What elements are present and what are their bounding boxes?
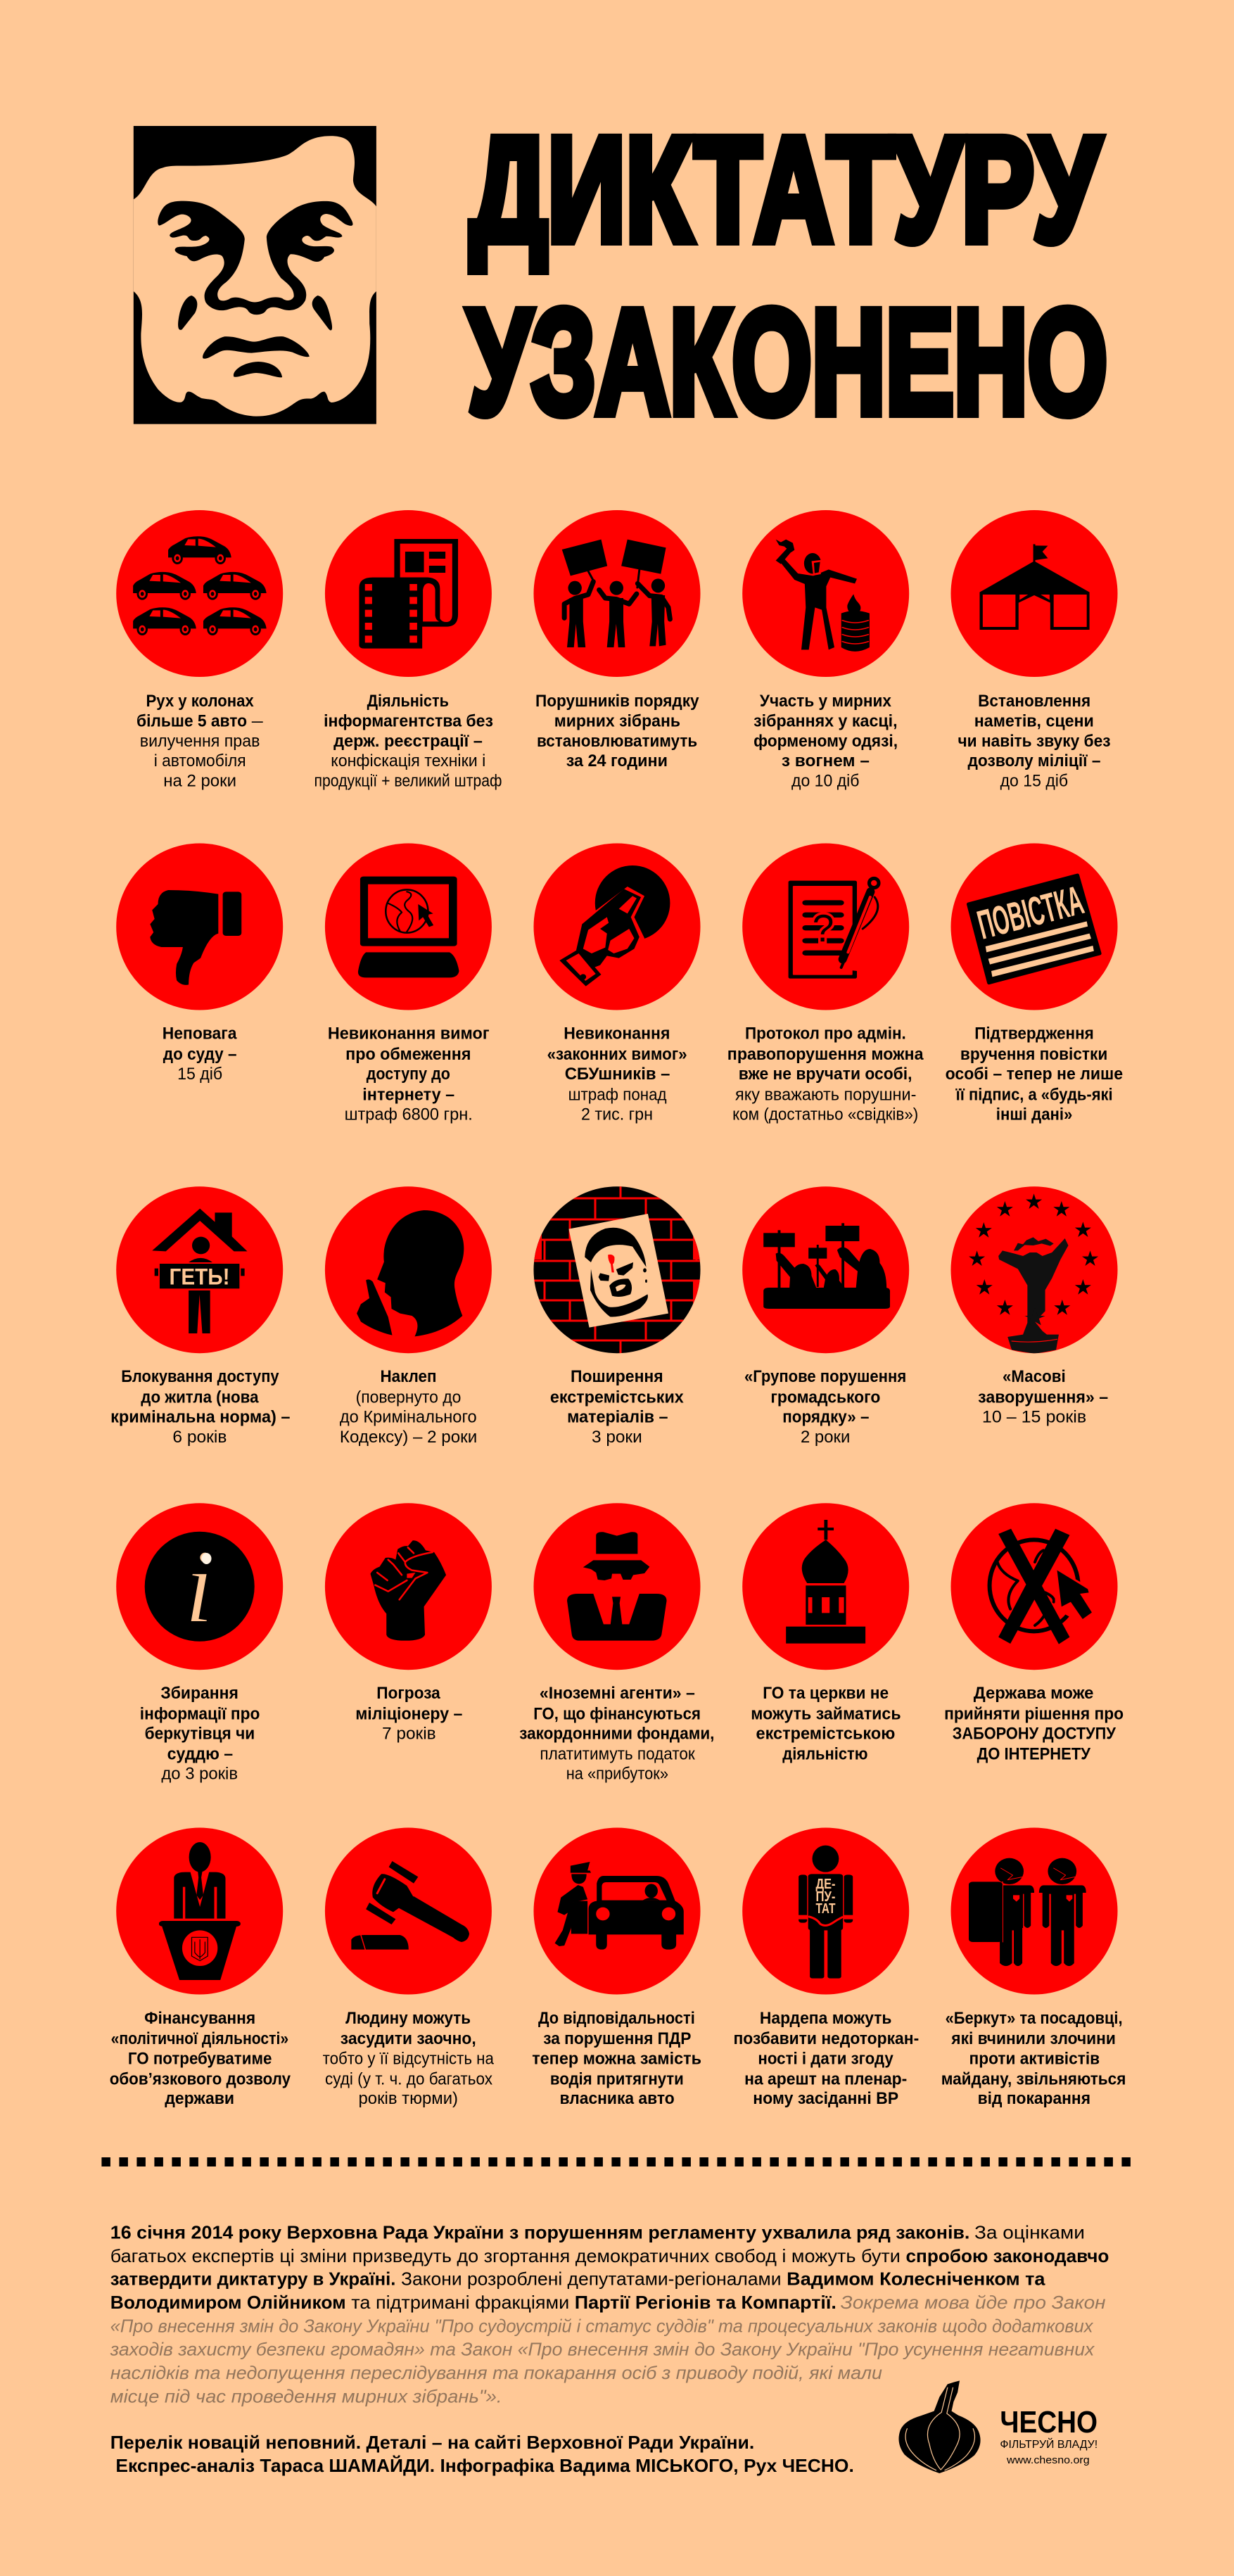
text block: credits: Експрес-аналіз Тараса ШАМАЙДИ. Інфографіка Вадима МІСЬКОГО, Рух ЧЕСНО. bbox=[115, 2455, 854, 2476]
caption bbox=[751, 1684, 901, 1764]
caption: мирних зібрань bbox=[554, 711, 680, 730]
caption bbox=[744, 1367, 906, 1447]
caption: громадського bbox=[770, 1388, 880, 1407]
caption: Встановлення bbox=[978, 692, 1090, 711]
caption bbox=[532, 2009, 701, 2108]
caption: на 2 роки bbox=[163, 771, 236, 790]
caption: років тюрми) bbox=[359, 2089, 458, 2108]
panel: protocol bbox=[727, 843, 924, 1124]
caption: можуть займатись bbox=[751, 1704, 901, 1723]
caption: Блокування доступу bbox=[121, 1367, 279, 1386]
panel: defamation bbox=[325, 1186, 492, 1447]
caption: до 3 років bbox=[161, 1764, 238, 1783]
caption: «політичної діяльності» bbox=[111, 2029, 288, 2048]
caption: ДО ІНТЕРНЕТУ bbox=[977, 1745, 1091, 1764]
caption: «Групове порушення bbox=[744, 1367, 906, 1386]
caption: діяльністю bbox=[782, 1745, 868, 1764]
icon: spy in hat bbox=[533, 1503, 701, 1670]
icon: gavel bbox=[325, 1828, 492, 1994]
caption bbox=[753, 692, 898, 790]
caption: міліціонеру – bbox=[355, 1704, 462, 1723]
caption: «законних вимог» bbox=[547, 1045, 687, 1064]
logo: Chesno garlic: www.chesno.org bbox=[1006, 2454, 1090, 2466]
icon: speaker at podium bbox=[116, 1828, 283, 1994]
caption: інформації про bbox=[140, 1704, 260, 1723]
icon: stencil portrait of Yanukovych bbox=[134, 126, 376, 424]
caption: Рух у колонах bbox=[146, 692, 254, 711]
caption: Нардепа можуть bbox=[760, 2009, 892, 2028]
caption: 6 років bbox=[172, 1428, 227, 1447]
caption: Кодексу) – 2 роки bbox=[340, 1428, 477, 1447]
caption: більше 5 авто bbox=[136, 711, 247, 730]
caption: платитимуть податок bbox=[540, 1745, 695, 1764]
panel: internet restrictions bbox=[325, 843, 492, 1124]
logo: Chesno garlic: ФІЛЬТРУЙ ВЛАДУ! bbox=[1000, 2437, 1098, 2451]
caption: дозволу міліції – bbox=[968, 751, 1100, 770]
caption bbox=[550, 1367, 684, 1447]
panel: group violation bbox=[742, 1186, 909, 1447]
caption: матеріалів – bbox=[567, 1408, 668, 1427]
caption bbox=[978, 1367, 1108, 1427]
icon: thumbs down bbox=[116, 843, 283, 1010]
caption: до Кримінального bbox=[340, 1408, 477, 1427]
caption: Порушників порядку bbox=[535, 692, 699, 711]
caption bbox=[110, 1367, 290, 1447]
caption bbox=[136, 692, 264, 790]
icon: silhouette with finger on lips bbox=[325, 1186, 492, 1353]
caption: конфіскація техніки і bbox=[331, 751, 485, 770]
icon: handcuffed deputy: ТАТ bbox=[816, 1901, 836, 1917]
caption bbox=[535, 692, 699, 770]
caption: особі – тепер не лише bbox=[946, 1065, 1123, 1084]
caption: Держава може bbox=[974, 1684, 1093, 1703]
icon: traffic officer and car bbox=[533, 1828, 701, 1994]
caption: держави bbox=[165, 2089, 234, 2108]
panel: summons bbox=[946, 843, 1123, 1124]
panel: NGOs and churches bbox=[742, 1503, 909, 1764]
caption: вручення повістки bbox=[960, 1045, 1107, 1064]
caption bbox=[946, 1024, 1123, 1124]
caption: 3 роки bbox=[592, 1428, 642, 1447]
panel: internet ban bbox=[944, 1503, 1124, 1764]
caption: до 10 діб bbox=[791, 771, 860, 790]
caption: суді (у т. ч. до багатьох bbox=[325, 2069, 492, 2088]
panel: car owner liability bbox=[532, 1828, 701, 2108]
text block: summary of the laws: спробою законодавчо bbox=[906, 2245, 1109, 2266]
icon: poster on brick wall bbox=[528, 1186, 704, 1354]
text block: credits: Перелік новацій неповний. Деталі – на сайті Верховної Ради України. bbox=[110, 2432, 754, 2453]
caption: за порушення ПДР bbox=[543, 2029, 691, 2048]
header: portrait and title bbox=[134, 106, 1107, 445]
caption: правопорушення можна bbox=[727, 1045, 924, 1064]
text block: summary of the laws: та підтримані фракціями bbox=[351, 2292, 569, 2313]
caption: вилучення прав bbox=[140, 732, 260, 751]
caption: продукції + великий штраф bbox=[314, 771, 502, 790]
logo: Chesno garlic: ЧЕСНО bbox=[1000, 2405, 1098, 2439]
caption bbox=[110, 2009, 291, 2108]
icon: three protesters with signs bbox=[533, 510, 701, 677]
caption: (повернуто до bbox=[356, 1388, 461, 1407]
icon: handcuffed deputy bbox=[742, 1828, 909, 1994]
caption bbox=[944, 1684, 1124, 1764]
caption bbox=[314, 692, 502, 790]
caption bbox=[547, 1024, 687, 1124]
caption bbox=[941, 2009, 1126, 2108]
caption: СБУшників – bbox=[565, 1065, 670, 1084]
text block: summary of the laws: наслідків та недопущення переслідування та покарання осіб з приводу подій, які мали bbox=[110, 2362, 882, 2383]
caption: засудити заочно, bbox=[341, 2029, 476, 2048]
caption: тепер можна замість bbox=[532, 2049, 701, 2068]
text block: summary of the laws: Вадимом Колесніченком та bbox=[787, 2269, 1045, 2290]
caption: позбавити недоторкан- bbox=[733, 2029, 919, 2048]
caption: «Беркут» та посадовці, bbox=[946, 2009, 1123, 2028]
icon: crossed out globe and cursor bbox=[951, 1503, 1117, 1670]
caption: 2 роки bbox=[801, 1428, 850, 1447]
caption: доступу до bbox=[367, 1065, 450, 1084]
caption: до суду – bbox=[163, 1045, 236, 1064]
icon: church bbox=[742, 1503, 909, 1670]
panel: threat to police bbox=[325, 1503, 492, 1744]
icon: summons card bbox=[951, 843, 1117, 1010]
caption: – bbox=[252, 711, 264, 730]
caption bbox=[355, 1684, 462, 1744]
caption: кримінальна норма) – bbox=[110, 1408, 290, 1427]
caption: Поширення bbox=[571, 1367, 663, 1386]
caption: від покарання bbox=[978, 2089, 1090, 2108]
icon: crowd with placards bbox=[742, 1186, 909, 1353]
icon: handcuffed deputy: ПУ- bbox=[816, 1889, 836, 1905]
caption: проти активістів bbox=[969, 2049, 1100, 2068]
caption: ному засіданні ВР bbox=[753, 2089, 898, 2108]
caption: ГО та церкви не bbox=[763, 1684, 889, 1703]
caption: обов’язкового дозволу bbox=[110, 2069, 291, 2088]
icon: two riot police with shield bbox=[951, 1828, 1117, 1994]
caption: зібраннях у касці, bbox=[753, 711, 898, 730]
caption bbox=[958, 692, 1111, 790]
panel: foreign agents bbox=[519, 1503, 714, 1783]
caption: ГО потребуватиме bbox=[128, 2049, 272, 2068]
caption bbox=[140, 1684, 260, 1783]
caption: ГО, що фінансуються bbox=[533, 1704, 701, 1723]
caption: порядку» – bbox=[782, 1408, 869, 1427]
caption: Підтвердження bbox=[974, 1024, 1094, 1043]
panel: extremist materials bbox=[528, 1186, 704, 1447]
caption: інші дані» bbox=[996, 1105, 1072, 1124]
caption: до житла (нова bbox=[141, 1388, 259, 1407]
panel: MP immunity bbox=[733, 1828, 919, 2108]
icon: man with molotov and burning barrel bbox=[742, 510, 909, 677]
caption: вже не вручати особі, bbox=[739, 1065, 912, 1084]
icon: document with question mark and pen: ? bbox=[813, 906, 834, 950]
caption: які вчинили злочини bbox=[950, 2029, 1116, 2048]
caption: Неповага bbox=[163, 1024, 237, 1043]
caption: закордонними фондами, bbox=[519, 1725, 714, 1744]
panel: Berkut bbox=[941, 1828, 1126, 2108]
logo: Chesno garlic bbox=[898, 2380, 1098, 2473]
caption bbox=[733, 2009, 919, 2108]
caption: форменому одязі, bbox=[753, 732, 898, 751]
caption: ком (достатньо «свідків») bbox=[732, 1105, 918, 1124]
panel: blocking housing bbox=[110, 1186, 290, 1447]
caption: і автомобіля bbox=[154, 751, 246, 770]
panel: trial in absentia bbox=[323, 1828, 495, 2108]
text block: credits bbox=[110, 2432, 854, 2476]
title bbox=[468, 106, 1107, 445]
icon: computer with globe bbox=[325, 843, 492, 1010]
caption: екстремістською bbox=[756, 1725, 895, 1744]
text block: summary of the laws: місце під час проведення мирних зібрань"». bbox=[110, 2385, 502, 2406]
caption: на «прибуток» bbox=[566, 1764, 668, 1783]
icon: raised fist bbox=[325, 1503, 492, 1670]
caption: суддю – bbox=[167, 1745, 233, 1764]
caption: Діяльність bbox=[367, 692, 449, 711]
caption: на арешт на пленар- bbox=[744, 2069, 907, 2088]
panel: political activity funding bbox=[110, 1828, 291, 2108]
icon: pointing hand over black disc bbox=[533, 843, 701, 1010]
caption: «Масові bbox=[1003, 1367, 1066, 1386]
caption bbox=[340, 1367, 477, 1447]
caption: «Іноземні агенти» – bbox=[540, 1684, 695, 1703]
text block: summary of the laws: затвердити диктатуру в Україні. bbox=[110, 2269, 395, 2290]
caption: беркутівця чи bbox=[145, 1725, 255, 1744]
caption: наметів, сцени bbox=[974, 711, 1094, 730]
caption: Невиконання bbox=[564, 1024, 670, 1043]
caption: екстремістських bbox=[550, 1388, 684, 1407]
icon: independence monument with stars bbox=[951, 1186, 1117, 1354]
text block: summary of the laws bbox=[110, 2222, 1109, 2406]
panel: protesters 24 hours bbox=[533, 510, 701, 770]
caption: ності і дати згоду bbox=[758, 2049, 893, 2068]
panel: helmet and fire bbox=[742, 510, 909, 790]
icon: man under house roof with sign: ГЕТЬ! bbox=[169, 1264, 229, 1290]
text block: summary of the laws: За оцінками bbox=[974, 2222, 1085, 2243]
text block: summary of the laws: Партії Регіонів та Компартії. bbox=[575, 2292, 837, 2313]
caption: за 24 години bbox=[566, 751, 668, 770]
icon: tent with flag bbox=[951, 510, 1117, 677]
text block: summary of the laws: Володимиром Олійником bbox=[110, 2292, 346, 2313]
caption: До відповідальності bbox=[538, 2009, 695, 2028]
text block: summary of the laws: багатьох експертів ці зміни призведуть до згортання демократичних свобод і можуть бути bbox=[110, 2245, 901, 2266]
text block: summary of the laws: 16 січня 2014 року Верховна Рада України з порушенням регламенту ухвалила ряд законів. bbox=[110, 2222, 969, 2243]
caption: Погроза bbox=[376, 1684, 440, 1703]
caption: її підпис, а «будь-які bbox=[955, 1085, 1113, 1104]
caption bbox=[323, 2009, 495, 2108]
caption: з вогнем – bbox=[782, 751, 870, 770]
caption bbox=[163, 1024, 237, 1084]
icon: man under house roof with sign bbox=[116, 1186, 283, 1353]
text block: summary of the laws: заходів захисту безпеки громадян» та Закон «Про внесення змін до Закону України "Про усунення негативних bbox=[110, 2339, 1095, 2360]
caption: 15 діб bbox=[177, 1065, 222, 1084]
panel: news agency bbox=[314, 510, 502, 790]
panel: collecting information bbox=[116, 1503, 283, 1783]
caption: водія притягнути bbox=[550, 2069, 684, 2088]
caption: про обмеження bbox=[345, 1045, 471, 1064]
text block: summary of the laws: Зокрема мова йде про Закон bbox=[841, 2292, 1106, 2313]
caption: штраф понад bbox=[568, 1085, 667, 1104]
icon: five cars bbox=[116, 510, 283, 677]
caption bbox=[727, 1024, 924, 1124]
caption: тобто у її відсутність на bbox=[323, 2049, 495, 2068]
icon: document with question mark and pen bbox=[742, 843, 909, 1010]
caption: встановлюватимуть bbox=[537, 732, 697, 751]
icon: newspaper and film bbox=[325, 510, 492, 677]
panel: motorcades bbox=[116, 510, 283, 790]
panel: contempt of court bbox=[116, 843, 283, 1084]
caption: власника авто bbox=[560, 2089, 675, 2108]
caption: Наклеп bbox=[380, 1367, 436, 1386]
icon: handcuffed deputy: ДЕ- bbox=[816, 1877, 836, 1892]
caption: Невиконання вимог bbox=[328, 1024, 490, 1043]
caption: чи навіть звуку без bbox=[958, 732, 1111, 751]
caption: Фінансування bbox=[144, 2009, 255, 2028]
text block: summary of the laws: Закони розроблені депутатами-регіоналами bbox=[401, 2269, 781, 2290]
caption: яку вважають порушни- bbox=[735, 1085, 916, 1104]
caption: Збирання bbox=[160, 1684, 238, 1703]
caption: майдану, звільняються bbox=[941, 2069, 1126, 2088]
caption bbox=[328, 1024, 490, 1124]
caption: Участь у мирних bbox=[760, 692, 892, 711]
panel: mass riots bbox=[951, 1186, 1117, 1427]
icon: summons card: ПОВІСТКА bbox=[973, 877, 1088, 948]
panel: SBU demands bbox=[533, 843, 701, 1124]
caption: Людину можуть bbox=[345, 2009, 471, 2028]
caption: 10 – 15 років bbox=[982, 1408, 1086, 1427]
caption: Протокол про адмін. bbox=[745, 1024, 906, 1043]
caption: прийняти рішення про bbox=[944, 1704, 1124, 1723]
caption: 2 тис. грн bbox=[581, 1105, 653, 1124]
caption: 7 років bbox=[382, 1725, 436, 1744]
icon: info sign bbox=[116, 1503, 283, 1670]
text block: summary of the laws: «Про внесення змін до Закону України "Про судоустрій і статус суддів" та процесуальних законів щодо додаткових bbox=[110, 2315, 1093, 2336]
caption: інтернету – bbox=[362, 1085, 454, 1104]
icon: garlic bbox=[898, 2380, 981, 2473]
caption: заворушення» – bbox=[978, 1388, 1108, 1407]
caption: до 15 діб bbox=[1000, 771, 1068, 790]
panel: tents bbox=[951, 510, 1117, 790]
caption bbox=[519, 1684, 714, 1783]
caption: штраф 6800 грн. bbox=[345, 1105, 473, 1124]
icon: info sign: i bbox=[184, 1528, 214, 1645]
caption: ЗАБОРОНУ ДОСТУПУ bbox=[953, 1725, 1117, 1744]
caption: інформагентства без bbox=[324, 711, 493, 730]
caption: держ. реєстрації – bbox=[333, 732, 483, 751]
